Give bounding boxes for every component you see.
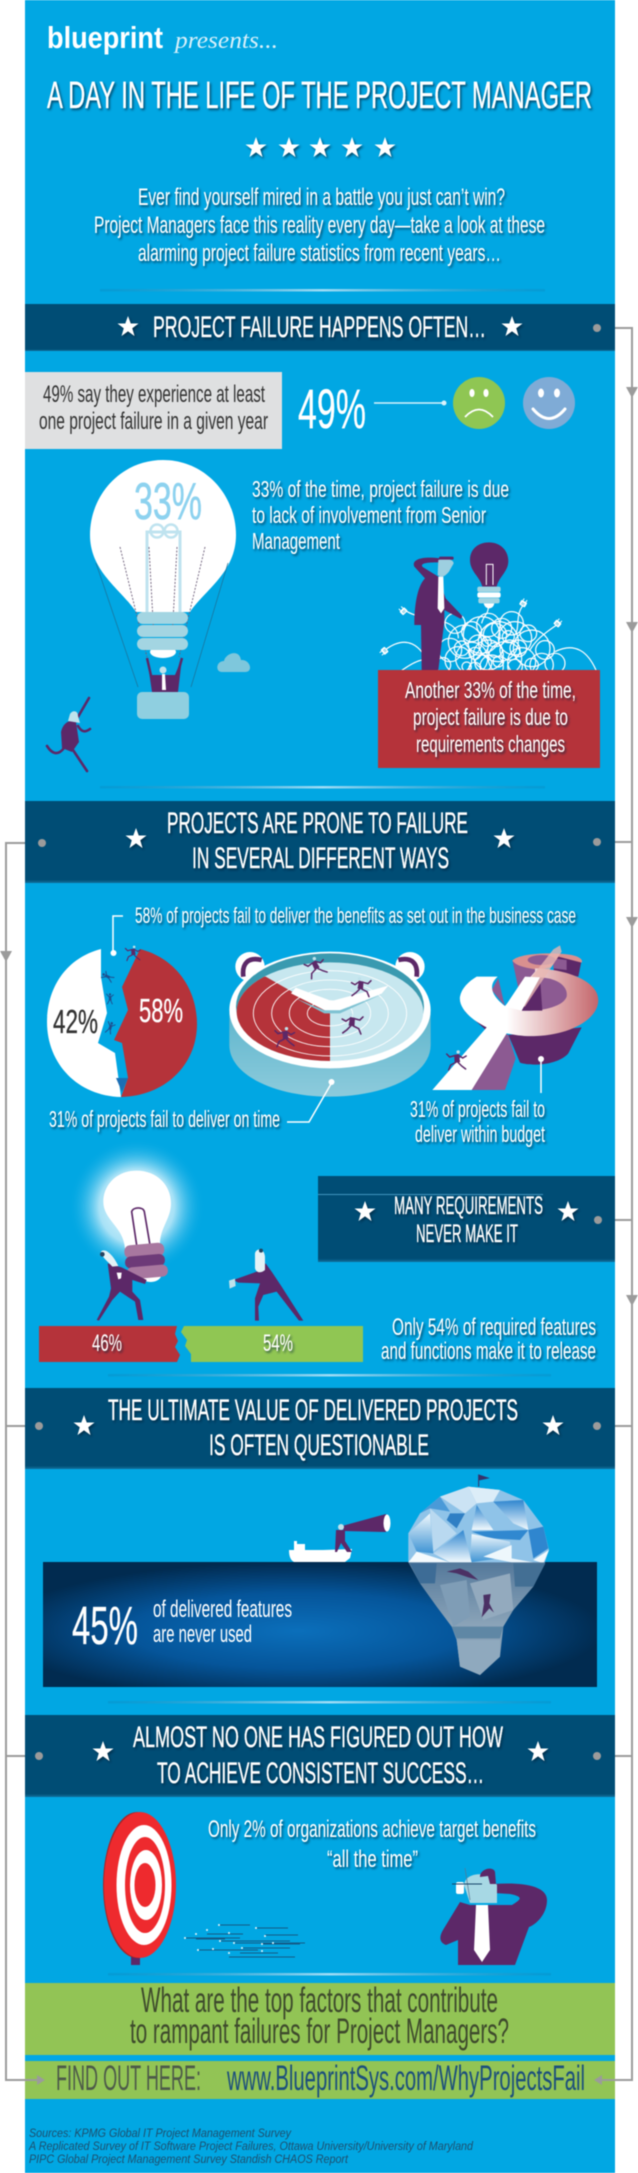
panel: dark water 45% never used: of delivered features bbox=[153, 1596, 292, 1623]
chart: split pie 42% and 58% bbox=[47, 946, 197, 1097]
intro paragraph bbox=[94, 184, 545, 267]
icon: happy blue face bbox=[523, 377, 575, 429]
bar chart: 46% vs 54%: 54% bbox=[263, 1330, 293, 1357]
logo: blueprint presents: presents... bbox=[173, 28, 278, 54]
illustration: man confused by tangled cables and purple bulb bbox=[379, 542, 597, 678]
section bar 4: almost no one has figured out how bbox=[25, 1715, 615, 1797]
illustration: ship with man and telescope bbox=[289, 1514, 390, 1562]
five stars bbox=[246, 137, 396, 157]
panel: dark water 45% never used: are never used bbox=[153, 1621, 252, 1648]
logo: blueprint presents: blueprint bbox=[47, 20, 163, 55]
callout: another 33% requirements changes: requirements changes bbox=[416, 731, 565, 757]
sources footnote: A Replicated Survey of IT Software Project Failures, Ottawa University/University of Maryland bbox=[28, 2141, 474, 2153]
section bar 3: ultimate value of delivered projects: IS OFTEN QUESTIONABLE bbox=[209, 1429, 429, 1462]
panel: dark water 45% never used: 45% bbox=[72, 1596, 138, 1656]
callout: another 33% requirements changes: project failure is due to bbox=[413, 704, 568, 730]
callout: another 33% requirements changes bbox=[378, 670, 600, 768]
logo: blueprint presents bbox=[47, 20, 278, 55]
label: 31% fail to deliver on time with leader: 31% of projects fail to deliver on time bbox=[49, 1106, 280, 1132]
text: 33% lack of involvement bbox=[252, 476, 509, 554]
icon: target bullseye bbox=[103, 1812, 176, 1965]
label: 31% fail to deliver on time with leader bbox=[49, 1079, 334, 1132]
icon: sad green face bbox=[453, 377, 505, 429]
call to action: find out here link: FIND OUT HERE: bbox=[56, 2059, 201, 2098]
call to action: find out here link bbox=[25, 2059, 615, 2099]
illustration: missed arrows bbox=[184, 1924, 305, 1957]
illustration: iceberg light bulb with divers bbox=[408, 1475, 549, 1675]
chart: split pie 42% and 58%: 58% bbox=[139, 992, 183, 1029]
chart: split pie 42% and 58%: 42% bbox=[53, 1003, 98, 1040]
text: only 2% achieve target benefits: “all the time” bbox=[327, 1846, 418, 1873]
stat box: 49% experience failure: 49% say they experience at least bbox=[43, 381, 265, 408]
panel: dark water 45% never used bbox=[43, 1562, 597, 1687]
call to action: top factors question bbox=[25, 1981, 615, 2055]
text: 31% fail to deliver within budget: deliver within budget bbox=[415, 1121, 545, 1147]
sources footnote: PIPC Global Project Management Survey Standish CHAOS Report bbox=[29, 2154, 349, 2166]
leader: budget pointer bbox=[538, 1056, 544, 1093]
sources footnote bbox=[28, 2128, 474, 2166]
stat box: 49% experience failure bbox=[25, 372, 282, 449]
section bar 2: projects are prone to failure: IN SEVERAL DIFFERENT WAYS bbox=[192, 842, 449, 875]
text: only 2% achieve target benefits bbox=[208, 1816, 536, 1873]
section bar 3: ultimate value of delivered projects bbox=[25, 1388, 615, 1469]
figure: running man reaching up bbox=[47, 698, 90, 771]
text: 33% lack of involvement: 33% of the time, project failure is due bbox=[252, 476, 509, 502]
text: 33% lack of involvement: Management bbox=[252, 528, 340, 554]
text: 58% fail to deliver the benefits with leader bbox=[110, 903, 576, 956]
illustration: light bulb hot air balloon with 33%: 33% bbox=[134, 473, 202, 531]
text: 31% fail to deliver within budget: 31% of projects fail to bbox=[410, 1096, 545, 1122]
bar chart: 46% vs 54%: 46% bbox=[92, 1330, 122, 1357]
section box: many requirements never make it bbox=[318, 1176, 615, 1262]
figure: man holding bow, hand behind head bbox=[440, 1868, 547, 1965]
section box: many requirements never make it: NEVER MAKE IT bbox=[416, 1220, 518, 1248]
text: 31% fail to deliver within budget bbox=[410, 1096, 545, 1147]
section bar 2: projects are prone to failure bbox=[25, 801, 615, 883]
sources footnote: Sources: KPMG Global IT Project Management Survey bbox=[29, 2128, 292, 2140]
text: 33% lack of involvement: to lack of involvement from Senior bbox=[252, 502, 486, 528]
illustration: light bulb hot air balloon with 33% bbox=[90, 460, 236, 719]
illustration: men carrying glowing light bulb bbox=[68, 1138, 303, 1321]
bar chart: 46% vs 54% bbox=[39, 1326, 363, 1362]
icon: cloud bbox=[217, 653, 250, 672]
49% big number with pointer: 49% bbox=[298, 377, 366, 440]
text: only 54% of required features bbox=[381, 1314, 596, 1365]
illustration: stopwatch clock running track bbox=[225, 952, 431, 1097]
illustration: giant dollar sign with climbing man bbox=[432, 945, 598, 1090]
stat box: 49% experience failure: one project failure in a given year bbox=[39, 408, 268, 435]
section bar 1: project failure happens often bbox=[25, 304, 615, 351]
